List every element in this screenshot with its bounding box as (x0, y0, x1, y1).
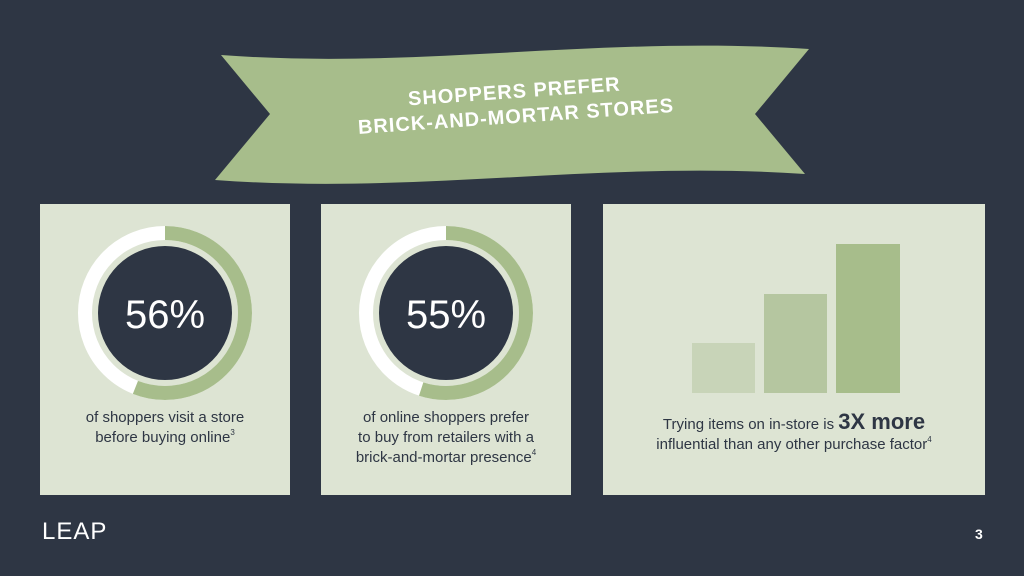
caption (356, 409, 536, 466)
donut chart 55%: 55% (406, 293, 486, 337)
panel: 55% (321, 204, 571, 495)
caption: Trying items on in-store is 3X more (663, 409, 925, 434)
page number: 3 (975, 526, 983, 542)
panel: 56% (40, 204, 290, 495)
caption: brick-and-mortar presence4 (356, 448, 536, 466)
caption (656, 409, 932, 453)
caption: of shoppers visit a store (86, 409, 244, 426)
donut chart 56%: 56% (125, 293, 205, 337)
logo: LEAP (42, 518, 107, 545)
donut chart 55% (359, 226, 533, 400)
caption: influential than any other purchase factor4 (656, 435, 932, 453)
title text (356, 70, 675, 139)
caption: to buy from retailers with a (358, 429, 534, 446)
title banner (215, 46, 809, 184)
panel: 3X more (603, 204, 985, 495)
caption (86, 409, 244, 446)
caption: of online shoppers prefer (363, 409, 529, 426)
title text: BRICK-AND-MORTAR STORES (357, 95, 675, 139)
title text: SHOPPERS PREFER (407, 74, 621, 110)
caption: before buying online3 (95, 428, 235, 446)
donut chart 56% (78, 226, 252, 400)
bar chart (692, 244, 900, 393)
